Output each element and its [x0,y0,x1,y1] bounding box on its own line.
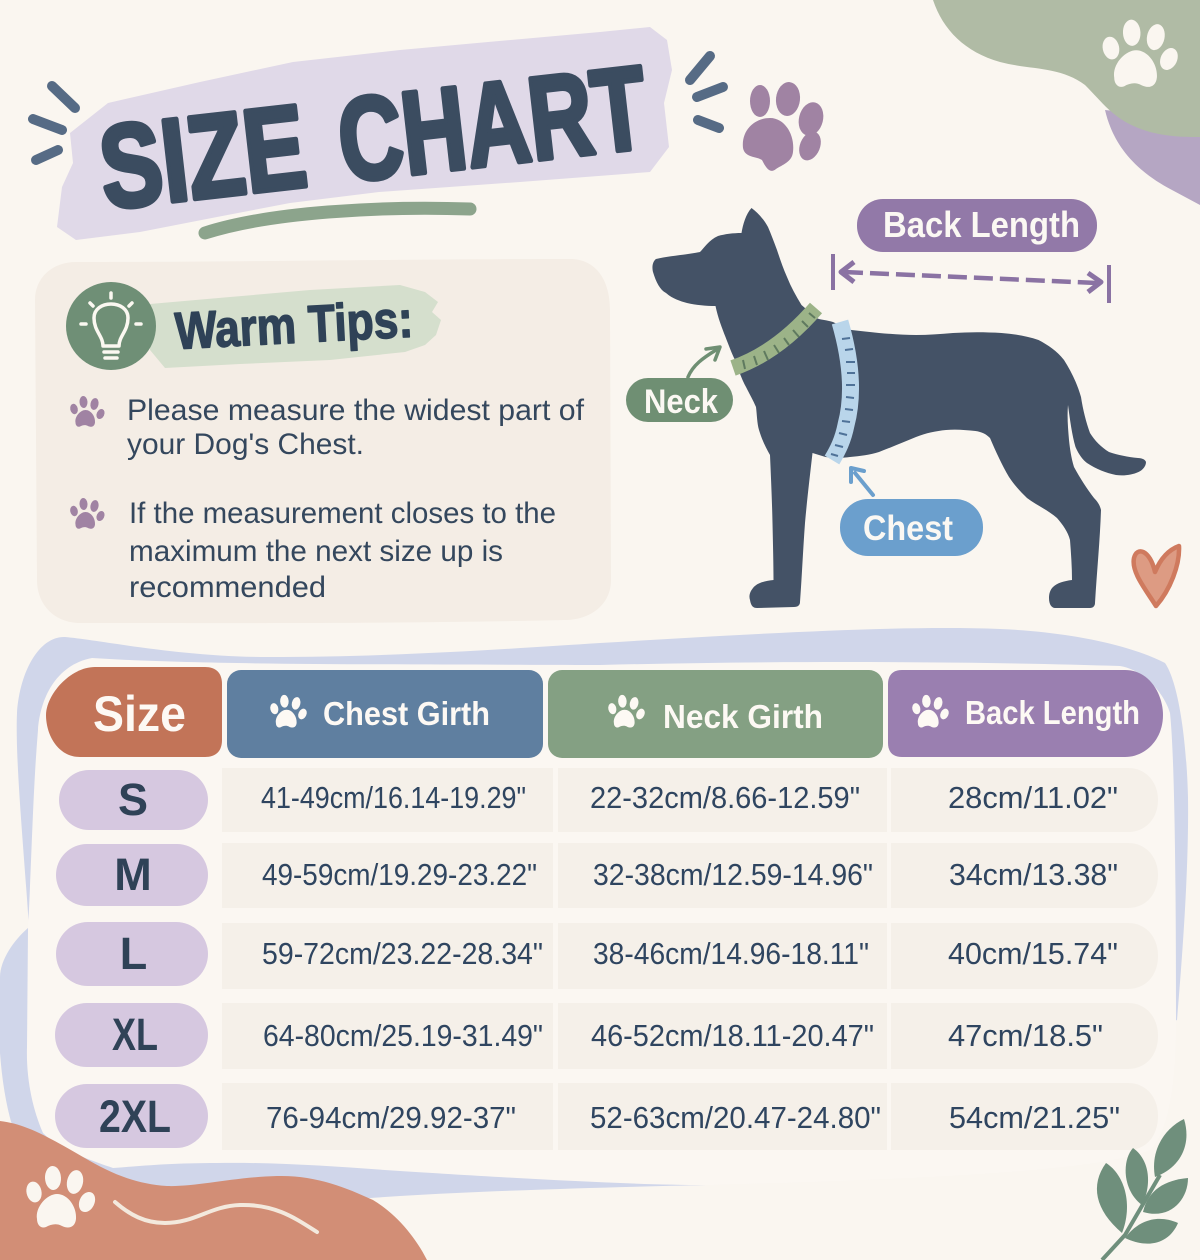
header: neck girth [548,670,883,758]
title: CHART [331,42,653,208]
arrow: neck [688,347,720,377]
row: S: S [118,774,148,825]
row: 2XL [55,1083,1158,1150]
accent rays right of title [690,56,723,128]
label: chest [840,499,983,556]
periwinkle band under table [43,1133,706,1198]
row: XL: XL [112,1009,158,1060]
icon: heart [1134,546,1179,606]
row: L [56,922,1158,989]
header: size: Size [93,686,186,742]
row: M: M [114,849,152,900]
tip 1: Please measure the widest part of [127,394,585,427]
chest tape [831,322,855,460]
decorative corner blob: top right [933,0,1200,205]
tip 2 [69,497,556,604]
row: 2XL: 54cm/21.25" [949,1100,1120,1135]
icon: purple paw [743,81,827,171]
decorative corner blob: bottom left [0,1121,427,1260]
row: L: L [120,928,147,979]
row: M: 49-59cm/19.29-23.22" [262,857,537,892]
row: S: 41-49cm/16.14-19.29" [261,780,526,815]
row: M [56,843,1158,908]
icon: white paw top right [1101,19,1181,87]
header: back length: Back Length [965,694,1140,731]
row: S: 28cm/11.02" [948,780,1118,815]
row: XL: 47cm/18.5" [948,1018,1103,1053]
row: M: 34cm/13.38" [949,857,1118,892]
label: neck: Neck [644,383,718,421]
table panel [27,658,1176,1185]
tip 2: maximum the next size up is [129,535,503,568]
icon: white paw bottom left [24,1166,98,1228]
tip 2: recommended [129,571,326,604]
tip 2: If the measurement closes to the [129,497,556,530]
row: 2XL: 76-94cm/29.92-37" [266,1100,516,1135]
row: L: 59-72cm/23.22-28.34" [262,936,543,971]
row: L: 38-46cm/14.96-18.11" [593,936,869,971]
row: XL: 46-52cm/18.11-20.47" [591,1018,874,1053]
title brush background [57,27,672,240]
row: XL [55,1003,1158,1069]
title: SIZE [93,80,313,235]
dog silhouette [652,208,1146,608]
label: chest: Chest [863,509,953,548]
header: back length [888,670,1163,757]
label: neck [626,378,733,422]
arrow: back length span [833,254,1109,303]
title [93,42,653,235]
row: 2XL: 2XL [99,1091,171,1142]
icon: leaf sprig [1097,1119,1188,1260]
row: S: 22-32cm/8.66-12.59" [590,780,860,815]
panel: warm tips [35,259,611,623]
tip 1: your Dog's Chest. [127,428,364,461]
accent rays left of title [33,86,75,160]
header: size [46,667,222,757]
squiggle [115,1202,317,1232]
row: 2XL: 52-63cm/20.47-24.80" [590,1100,881,1135]
row: M: 32-38cm/12.59-14.96" [593,857,873,892]
arrow: chest [851,468,873,495]
row: S [59,768,1158,832]
header: chest girth: Chest Girth [323,695,490,732]
label: back length: Back Length [883,204,1080,245]
dog diagram [626,199,1146,608]
title underline [205,208,470,233]
header: chest girth [227,670,543,758]
row: L: 40cm/15.74" [948,936,1118,971]
tip 1 [69,394,585,461]
icon: light bulb [66,282,156,370]
row: XL: 64-80cm/25.19-31.49" [263,1018,543,1053]
label: back length [857,199,1097,252]
table backdrop blob [17,628,1188,1100]
heading: warm tips: Warm Tips: [174,291,414,361]
heading brush [150,285,441,368]
header: neck girth: Neck Girth [663,698,823,735]
lower left backdrop blob [0,928,60,1145]
neck collar [733,308,816,369]
